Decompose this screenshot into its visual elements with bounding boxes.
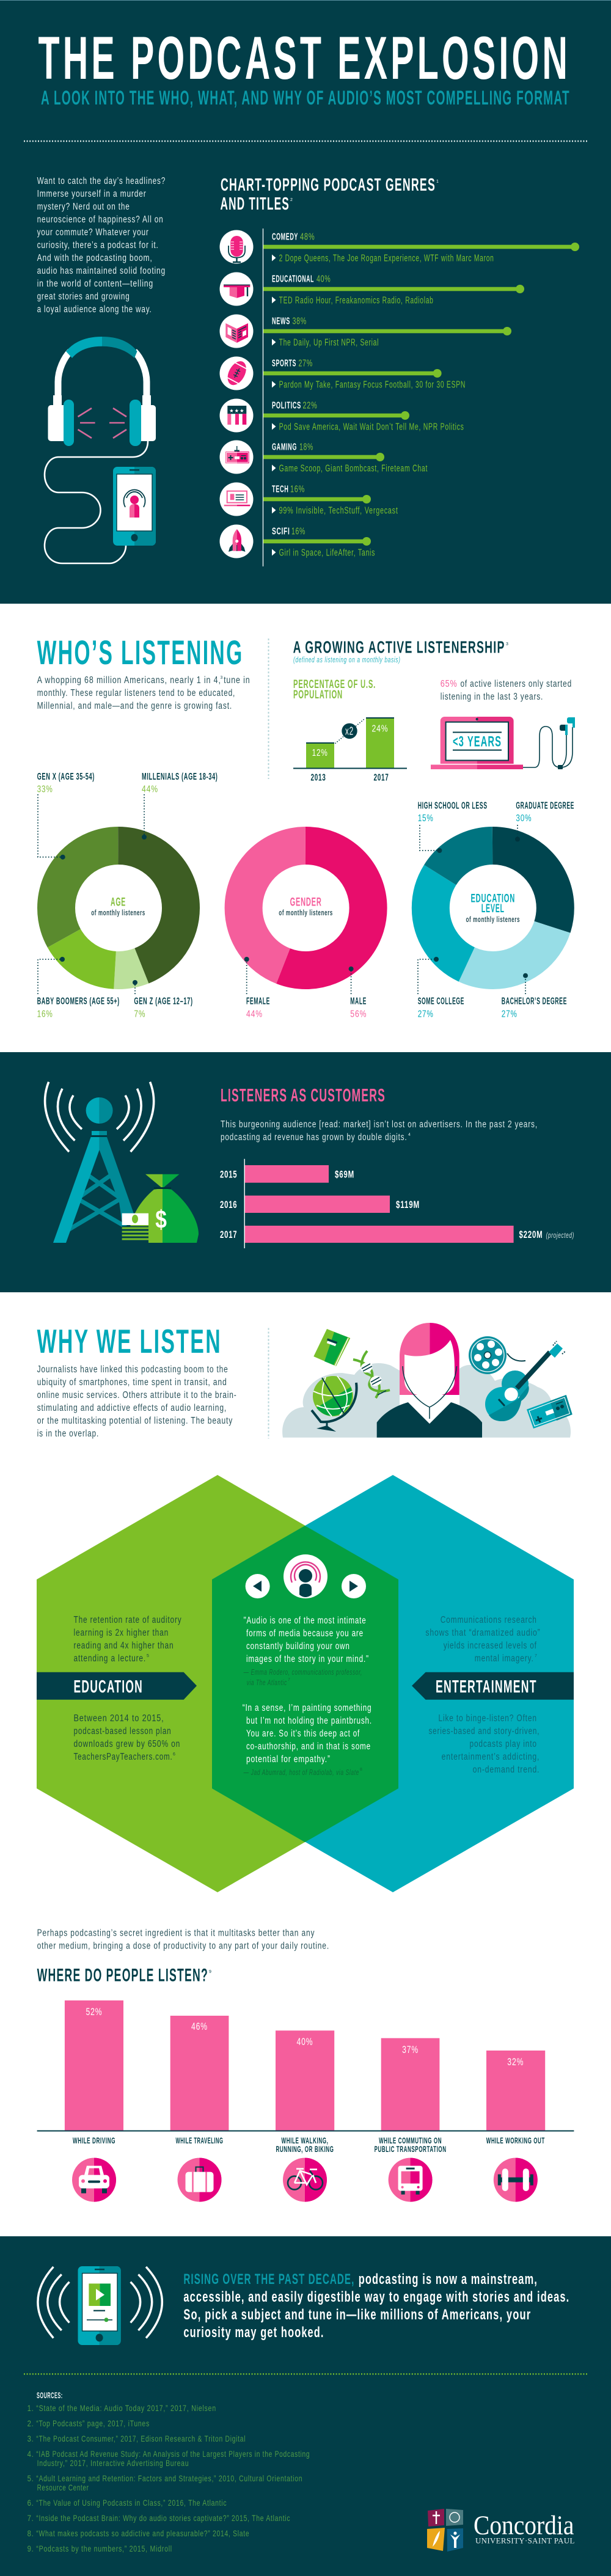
text: who's listening intro: Millennial, and male—and the genre is growing fast. <box>37 701 232 711</box>
text: center quotes: potential for empathy.” <box>246 1754 331 1765</box>
text: sources: Resource Center <box>37 2483 89 2492</box>
text: education facts bottom: downloads grew by 650% on <box>73 1739 180 1749</box>
text: education facts bottom: TeachersPayTeachers.com. <box>73 1752 172 1762</box>
row: comedy: 48% <box>300 232 315 242</box>
labels: listening locations: WHILE DRIVING <box>73 2135 115 2145</box>
text: why we listen intro: ubiquity of smartphones, time spent in transit, and <box>37 1377 227 1388</box>
heading: chart-topping genres: CHART-TOPPING PODCAST GENRES <box>221 175 436 195</box>
heading: growing active listenership: 3 <box>506 642 508 646</box>
text: entertainment facts top: shows that “dramatized audio” <box>425 1628 541 1638</box>
row: sports: Pardon My Take, Fantasy Focus Football, 30 for 30 ESPN <box>279 379 466 390</box>
labels: donut percentages: 16% <box>37 1009 53 1019</box>
text: center quotes: forms of media because you are <box>246 1628 364 1639</box>
text: 65% of listeners <box>441 679 572 702</box>
labels: donut percentages: 15% <box>418 813 434 824</box>
row: scifi: SCIFI <box>272 526 290 536</box>
text: 65% of listeners: listening in the last 3 years. <box>441 692 543 702</box>
intro text: Want to catch the day’s headlines? <box>37 176 166 186</box>
text: sources: Industry,” 2017, Interactive Advertising Bureau <box>37 2458 189 2468</box>
row: politics <box>220 398 464 433</box>
labels: donut percentages: 27% <box>502 1009 518 1019</box>
heading: growing active listenership <box>293 637 508 664</box>
illustration: listener and interests <box>282 1323 573 1438</box>
labels: listening locations: WHILE TRAVELING <box>176 2135 224 2145</box>
labels: donut percentages: 7% <box>134 1009 145 1019</box>
text: why we listen intro: Journalists have linked this podcasting boom to the <box>37 1364 229 1375</box>
label: percentage of population: POPULATION <box>293 689 343 701</box>
banner: education: EDUCATION <box>73 1677 143 1697</box>
intro text: a loyal audience along the way. <box>37 304 152 315</box>
labels: donut percentages: 44% <box>142 785 158 794</box>
banner: entertainment <box>412 1672 574 1700</box>
intro text: curiosity, there’s a podcast for it. <box>37 240 159 251</box>
chart: age donut <box>56 846 181 970</box>
chart: listening locations: 46% <box>191 2021 208 2032</box>
intro text: audio has maintained solid footing <box>37 266 166 276</box>
labels: listening locations: PUBLIC TRANSPORTATION <box>375 2144 447 2154</box>
icon: laptop with earbuds: <3 YEARS <box>453 734 502 750</box>
labels: donut categories <box>37 772 574 1007</box>
chart: age donut: AGE <box>111 896 126 909</box>
text: sources: 6. <box>27 2498 34 2508</box>
text: sources: 4. <box>27 2449 34 2459</box>
text: who's listening intro <box>37 675 251 711</box>
text: multitasking intro: Perhaps podcasting’s secret ingredient is that it multitasks better than any <box>37 1928 315 1938</box>
text: center quotes: You are. So it’s this deep act of <box>246 1729 360 1739</box>
labels: listening locations: RUNNING, OR BIKING <box>276 2144 334 2154</box>
text: sources: “Top Podcasts” page, 2017, iTunes <box>36 2418 150 2428</box>
row: politics: Pod Save America, Wait Wait Don’t Tell Me, NPR Politics <box>279 422 464 432</box>
text: sources: “IAB Podcast Ad Revenue Study: An Analysis of the Largest Players in the Podcasting <box>36 2449 310 2459</box>
intro text: Immerse yourself in a murder <box>37 189 147 199</box>
text: entertainment facts top <box>425 1615 541 1664</box>
text: sources: 8. <box>27 2528 34 2538</box>
heading: where do people listen: 9 <box>209 1970 211 1974</box>
banner: education <box>37 1672 197 1700</box>
icon: football <box>224 358 250 388</box>
chart: population bars: 12% <box>312 748 328 758</box>
text: sources: “Podcasts by the numbers,” 2015, Midroll <box>36 2544 172 2553</box>
chart: population bars: x2 <box>345 725 354 737</box>
chart: education donut <box>431 846 555 970</box>
text: why we listen intro: stimulating and addictive effects of audio learning, <box>37 1403 227 1413</box>
text: education facts top <box>73 1615 182 1664</box>
text: ad revenue paragraph: podcasting ad revenue has grown by double digits. <box>221 1132 407 1143</box>
chart: population bars <box>293 717 407 783</box>
row: news: The Daily, Up First NPR, Serial <box>279 337 379 348</box>
labels: donut categories: MALE <box>350 996 367 1007</box>
labels: donut categories: HIGH SCHOOL OR LESS <box>418 800 488 811</box>
text: education facts bottom <box>73 1713 180 1762</box>
chart: listening locations: 40% <box>297 2036 313 2047</box>
heading: where do people listen: WHERE DO PEOPLE LISTEN? <box>37 1966 208 1986</box>
icon: bicycle <box>283 2158 327 2202</box>
panel: who's listening <box>37 633 575 1019</box>
text: entertainment facts top: Communications research <box>441 1615 537 1625</box>
icon: dumbbell <box>494 2158 538 2202</box>
text: education facts top: reading and 4x higher than <box>73 1641 174 1651</box>
icon: microphone <box>229 236 245 262</box>
text: why we listen intro: or the multitasking potential of listening. The beauty <box>37 1416 233 1426</box>
text: entertainment facts bottom: series-based and story-driven, <box>429 1726 540 1736</box>
text: entertainment facts bottom <box>429 1713 540 1775</box>
text: conclusion: RISING OVER THE PAST DECADE, <box>183 2271 354 2288</box>
text: conclusion: curiosity may get hooked. <box>183 2324 324 2341</box>
heading: chart-topping genres: 2 <box>290 198 293 202</box>
chart: population bars: 2013 <box>310 772 326 783</box>
chart: ad revenue bars: $69M <box>335 1168 354 1180</box>
icon: headphones and phone <box>45 337 156 563</box>
icon: newspaper <box>225 323 248 343</box>
text: center quotes: constantly building your own <box>246 1641 350 1652</box>
chart: ad revenue bars <box>220 1159 574 1248</box>
text: sources: “Inside the Podcast Brain: Why do audio stories captivate?” 2015, The Atlantic <box>36 2513 290 2523</box>
text: 65% of listeners: 65% <box>441 679 458 689</box>
row: comedy <box>220 230 579 264</box>
text: why we listen intro: online music services. Others attribute it to the brain- <box>37 1390 237 1400</box>
labels: donut percentages: 56% <box>350 1009 367 1019</box>
intro text: neuroscience of happiness? All on <box>37 214 164 225</box>
label: percentage of population: PERCENTAGE OF U.S. <box>293 678 376 691</box>
text: entertainment facts bottom: podcasts play into <box>469 1739 537 1749</box>
text: 65% of listeners: of active listeners only started <box>461 679 572 689</box>
intro text: And with the podcasting boom, <box>37 253 153 263</box>
text: entertainment facts top: mental imagery. <box>475 1653 534 1664</box>
text: entertainment facts top: yields increased levels of <box>444 1641 537 1651</box>
labels: donut categories: MILLENIALS (AGE 18-34) <box>142 772 218 782</box>
icon: graduation cap <box>224 285 250 298</box>
text: education facts bottom: 6 <box>173 1752 175 1757</box>
text: education facts bottom: podcast-based lesson plan <box>73 1726 171 1736</box>
text: sources: 9. <box>27 2544 34 2553</box>
row: educational: EDUCATIONAL <box>272 274 314 284</box>
labels: donut percentages: 30% <box>516 813 532 824</box>
icon: radio tower and money <box>45 1082 199 1243</box>
row: gaming <box>220 440 428 474</box>
heading: chart-topping genres: AND TITLES <box>220 194 290 214</box>
icon: suitcase <box>177 2158 221 2202</box>
text: ad revenue paragraph <box>221 1119 538 1143</box>
row: educational: 40% <box>316 274 331 284</box>
chart: listening locations: 52% <box>86 2006 103 2018</box>
text: education facts top: 5 <box>147 1654 149 1658</box>
text: sources: “What makes podcasts so addictive and pleasurable?” 2014, Slate <box>36 2528 249 2538</box>
row: sports: SPORTS <box>272 358 296 368</box>
chart: age donut: of monthly listeners <box>91 908 145 917</box>
text: sources: SOURCES: <box>37 2390 63 2400</box>
row: tech <box>220 483 398 516</box>
labels: listening locations <box>73 2135 545 2154</box>
text: who's listening intro: monthly. These regular listeners tend to be educated, <box>37 688 235 698</box>
row: tech: TECH <box>272 484 288 494</box>
text: multitasking intro <box>37 1928 329 1952</box>
label: percentage of population <box>293 678 376 701</box>
labels: donut categories: GEN X (AGE 35-54) <box>37 772 95 782</box>
text: center quotes <box>243 1615 372 1777</box>
text: sources: 1. <box>27 2403 34 2413</box>
row: gaming: GAMING <box>272 442 297 452</box>
chart: ad revenue bars: 2017 <box>220 1229 237 1240</box>
text: center quotes: 8 <box>360 1768 362 1772</box>
labels: donut categories: BABY BOOMERS (AGE 55+) <box>37 996 120 1007</box>
banner: entertainment: ENTERTAINMENT <box>436 1677 537 1697</box>
text: sources: 5. <box>27 2473 34 2483</box>
logo: concordia university: Concordia <box>474 2510 574 2541</box>
chart: gender donut: of monthly listeners <box>279 908 333 917</box>
text: education facts top: attending a lecture. <box>73 1653 146 1664</box>
heading: chart-topping genres <box>220 175 439 214</box>
icon: player controls <box>246 1554 366 1598</box>
row: tech: 99% Invisible, TechStuff, Vergecast <box>279 505 398 516</box>
heading: where do people listen <box>37 1966 211 1986</box>
chart: ad revenue bars: (projected) <box>546 1231 574 1240</box>
text: center quotes: — Emma Rodero, communications professor, <box>243 1667 362 1677</box>
labels: listening locations: WHILE COMMUTING ON <box>379 2135 442 2145</box>
text: center quotes: "Audio is one of the most intimate <box>244 1615 367 1626</box>
intro text: your commute? Whatever your <box>37 227 149 238</box>
heading: growing active listenership: (defined as listening on a monthly basis) <box>293 655 401 664</box>
icon: laptop with earbuds <box>431 717 575 769</box>
labels: donut categories: FEMALE <box>246 996 270 1007</box>
row: scifi: Girl in Space, LifeAfter, Tanis <box>279 547 375 558</box>
panel: listeners as customers <box>0 1052 611 1292</box>
chart: ad revenue bars: $119M <box>396 1199 420 1210</box>
row: news: NEWS <box>272 316 290 326</box>
text: center quotes: co-authorship, and in that is some <box>246 1741 371 1752</box>
intro text: great stories and growing <box>37 291 130 302</box>
logo: concordia university <box>427 2509 575 2552</box>
text: center quotes: 7 <box>288 1678 290 1682</box>
text: education facts top: The retention rate of auditory <box>73 1615 182 1625</box>
chart: ad revenue bars: $220M <box>519 1229 543 1240</box>
labels: listening locations: WHILE WORKING OUT <box>486 2135 545 2145</box>
text: multitasking intro: other medium, bringing a dose of productivity to any part of your daily routine. <box>37 1941 329 1952</box>
row: gaming: Game Scoop, Giant Bombcast, Fireteam Chat <box>279 463 428 474</box>
panel: conclusion and sources <box>0 2236 611 2576</box>
callouts: donut leader lines <box>38 794 525 994</box>
text: who's listening intro: A whopping 68 million Americans, nearly 1 in 4, tune in <box>37 675 251 686</box>
row: sports <box>220 357 466 390</box>
text: center quotes: via The Atlantic <box>247 1678 287 1687</box>
row: tech: 16% <box>290 484 305 494</box>
icon: radio tower and money: $ <box>155 1205 168 1234</box>
chart: listening locations: 32% <box>507 2056 524 2068</box>
labels: listening locations: WHILE WALKING, <box>281 2135 329 2145</box>
icon: rocket <box>229 529 246 552</box>
text: entertainment facts bottom: entertainment’s addicting, <box>442 1752 540 1762</box>
text: ad revenue paragraph: 4 <box>408 1133 411 1137</box>
text: center quotes: but I’m not holding the paintbrush. <box>246 1716 372 1726</box>
row: scifi: 16% <box>291 526 306 536</box>
labels: donut categories: GEN Z (AGE 12–17) <box>134 996 193 1007</box>
text: entertainment facts bottom: Like to binge-listen? Often <box>439 1713 537 1724</box>
text: sources: “State of the Media: Audio Today 2017,” 2017, Nielsen <box>36 2403 216 2413</box>
labels: donut percentages: 27% <box>418 1009 434 1019</box>
text: sources <box>27 2390 310 2553</box>
text: education facts bottom: Between 2014 to 2015, <box>73 1713 164 1724</box>
logo: concordia university: UNIVERSITY·SAINT PAUL <box>475 2536 575 2545</box>
intro text: in the world of content—telling <box>37 279 153 289</box>
chart: listening locations <box>37 2000 574 2131</box>
row: politics: POLITICS <box>272 400 301 411</box>
diagram: overlapping hexagons <box>37 1475 574 1892</box>
icon: phone with sound waves <box>38 2266 162 2345</box>
intro text: mystery? Nerd out on the <box>37 202 130 212</box>
panel: where do people listen <box>37 1928 574 2202</box>
text: sources: 3. <box>27 2434 34 2443</box>
chart: gender donut: GENDER <box>290 896 322 909</box>
row: news <box>220 314 511 348</box>
heading: why we listen: WHY WE LISTEN <box>37 1322 222 1360</box>
text: sources: 7. <box>27 2513 34 2523</box>
heading: chart-topping genres: 1 <box>436 180 439 184</box>
row: educational: TED Radio Hour, Freakanomics Radio, Radiolab <box>279 295 434 306</box>
intro text <box>37 176 166 315</box>
text: entertainment facts top: 7 <box>535 1654 537 1658</box>
text: education facts top: learning is 2x higher than <box>73 1628 169 1638</box>
text: center quotes: — Jad Abumrad, host of Radiolab, via Slate <box>243 1768 359 1777</box>
chart: listening locations: 37% <box>402 2044 419 2055</box>
labels: donut percentages: 44% <box>246 1009 263 1019</box>
row: politics: 22% <box>303 400 318 411</box>
heading: listeners as customers: LISTENERS AS CUSTOMERS <box>221 1086 386 1106</box>
row: scifi <box>220 524 375 558</box>
text: why we listen intro: is in the overlap. <box>37 1429 99 1439</box>
icon: flag building <box>227 406 246 425</box>
callouts: donut markers <box>60 835 528 985</box>
icon: car <box>72 2158 116 2202</box>
icon: flag building: ★★★ <box>229 408 245 414</box>
row: comedy: 2 Dope Queens, The Joe Rogan Experience, WTF with Marc Maron <box>279 253 494 263</box>
text: center quotes: “In a sense, I’m painting something <box>243 1703 371 1713</box>
chart: education donut: EDUCATION <box>470 892 515 906</box>
labels: donut percentages <box>37 785 532 1019</box>
text: sources: “Adult Learning and Retention: Factors and Strategies,” 2010, Cultural Orientation <box>36 2473 302 2483</box>
chart: ad revenue bars: 2016 <box>220 1199 237 1210</box>
text: sources: “The Podcast Consumer,” 2017, Edison Research & Triton Digital <box>36 2434 246 2443</box>
chart: education donut: of monthly listeners <box>466 915 520 924</box>
icon: laptop <box>224 491 250 506</box>
row: comedy: COMEDY <box>272 232 298 242</box>
row: educational <box>220 273 524 306</box>
text: sources: “The Value of Using Podcasts in Class,” 2016, The Atlantic <box>36 2498 227 2508</box>
icon: game controller <box>225 446 249 463</box>
row: news: 38% <box>292 316 307 326</box>
text: entertainment facts bottom: on-demand trend. <box>473 1765 540 1775</box>
row: gaming: 18% <box>299 442 313 452</box>
labels: donut categories: SOME COLLEGE <box>418 996 464 1007</box>
text: sources: 2. <box>27 2418 34 2428</box>
chart: ad revenue bars: 2015 <box>220 1168 237 1180</box>
text: who's listening intro: 3 <box>220 676 223 680</box>
icon: bus <box>389 2158 433 2202</box>
text: center quotes: images of the story in your mind." <box>246 1654 369 1664</box>
chart: population bars: 24% <box>371 723 389 734</box>
panel: header and genres <box>0 0 611 604</box>
labels: donut percentages: 33% <box>37 785 53 794</box>
row: sports: 27% <box>298 358 313 368</box>
chart: gender donut <box>244 846 368 970</box>
text: conclusion <box>183 2271 569 2341</box>
heading: who's listening: WHO’S LISTENING <box>37 633 244 671</box>
text: why we listen intro <box>37 1364 237 1439</box>
chart: education donut: LEVEL <box>481 902 505 915</box>
panel: why we listen <box>37 1322 574 1892</box>
chart: population bars: 2017 <box>374 772 389 783</box>
